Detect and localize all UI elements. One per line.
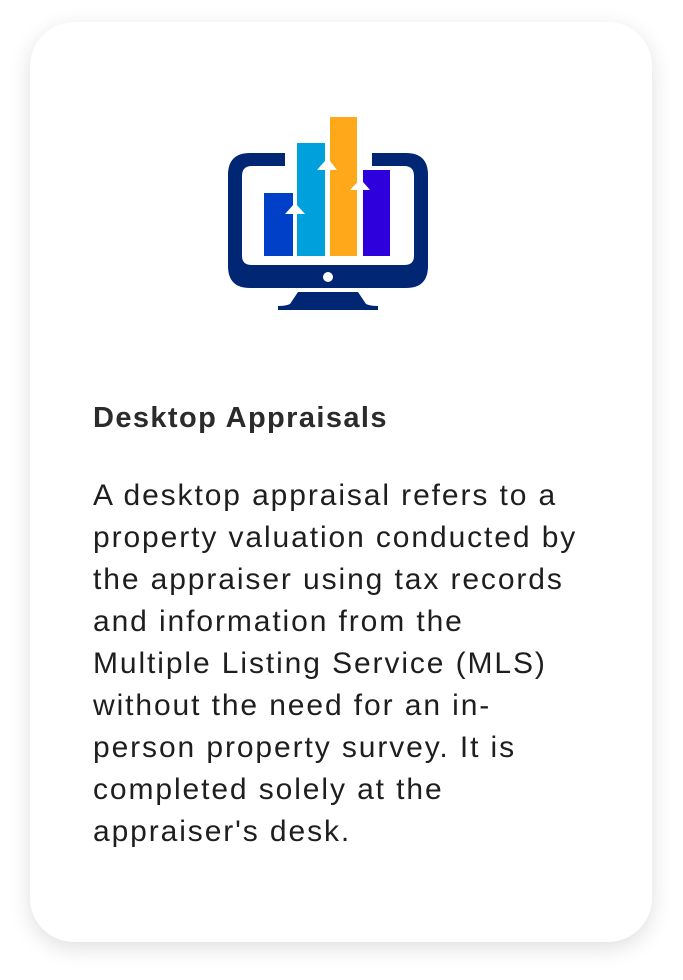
body text: without the need for an in- bbox=[93, 689, 491, 722]
body text: property valuation conducted by bbox=[93, 521, 577, 554]
body text: A desktop appraisal refers to a bbox=[93, 479, 557, 512]
monitor bezel bbox=[228, 153, 428, 288]
body text: and information from the bbox=[93, 605, 464, 638]
body text: person property survey. It is bbox=[93, 731, 516, 764]
body text bbox=[93, 479, 577, 848]
body text: Multiple Listing Service (MLS) bbox=[93, 647, 547, 680]
icon: desktop monitor with bar chart bbox=[228, 117, 428, 310]
title: Desktop Appraisals bbox=[93, 402, 388, 434]
body text: appraiser's desk. bbox=[93, 815, 351, 848]
body text: completed solely at the bbox=[93, 773, 444, 806]
body text: the appraiser using tax records bbox=[93, 563, 564, 596]
arrows bbox=[285, 158, 370, 256]
monitor stand bbox=[278, 292, 378, 310]
bars bbox=[264, 193, 293, 256]
